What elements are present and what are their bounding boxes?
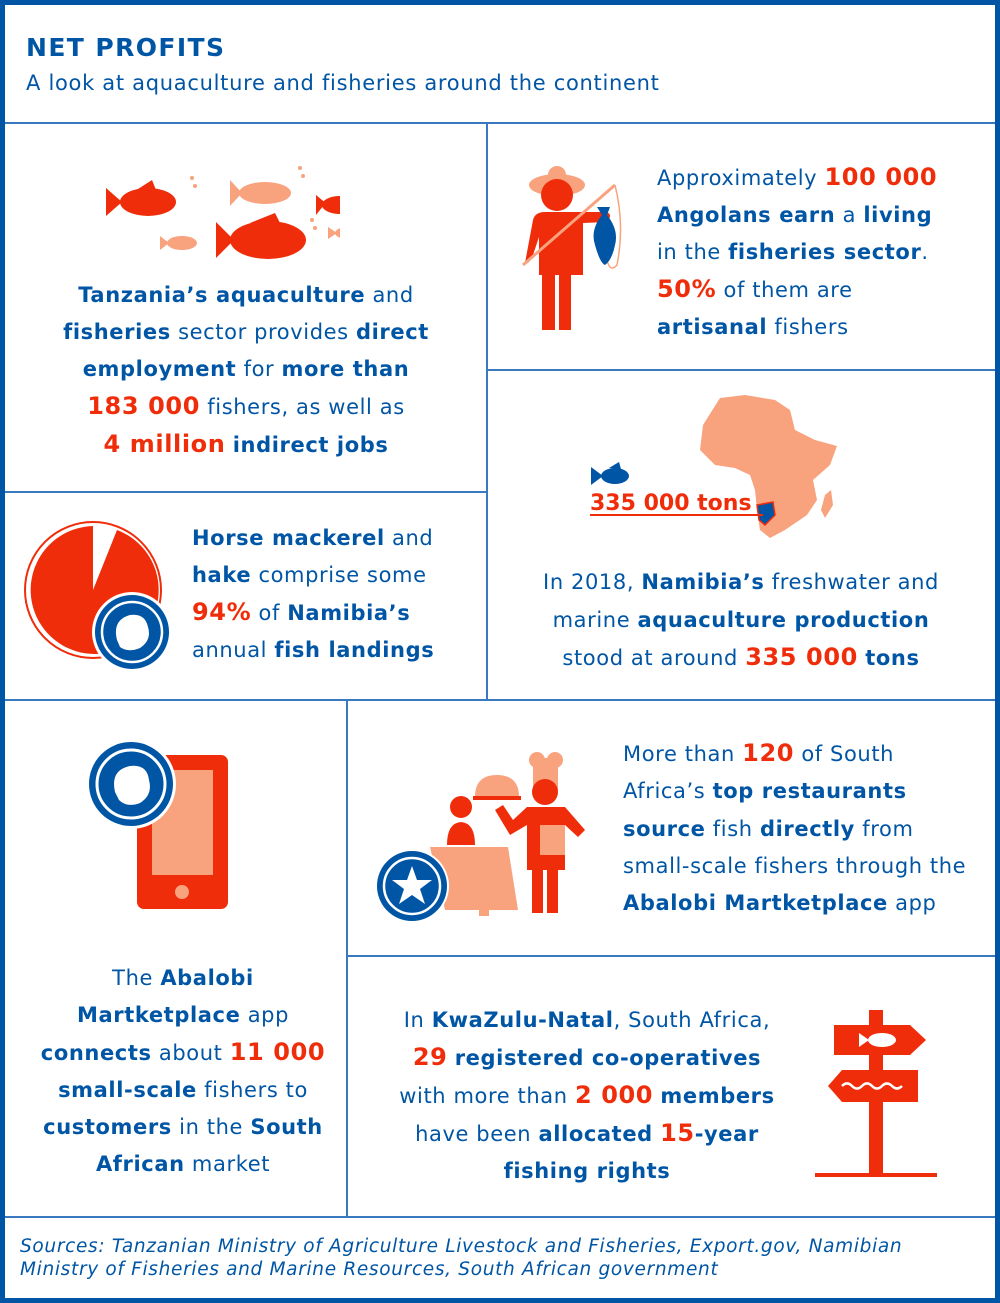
chart: pie 94%	[24, 521, 169, 669]
text: Abalobi app	[41, 966, 325, 1176]
text: Tanzania: fisheries sector provides direct	[63, 320, 429, 344]
text: Tanzania: Tanzania’s aquaculture and	[78, 283, 414, 307]
title: NET PROFITS	[26, 33, 225, 62]
icon: map of Africa	[590, 395, 837, 538]
text: KwaZulu-Natal: with more than 2 000 members	[399, 1081, 775, 1109]
text: Namibia production: In 2018, Namibia’s freshwater and	[543, 570, 939, 594]
text: Abalobi app: African market	[96, 1152, 270, 1176]
text: Abalobi app: The Abalobi	[112, 966, 254, 990]
text: Tanzania: 183 000 fishers, as well as	[87, 392, 405, 420]
subtitle: A look at aquaculture and fisheries around the continent	[26, 71, 660, 95]
text: restaurants: Africa’s top restaurants	[623, 779, 907, 803]
text: KwaZulu-Natal: fishing rights	[504, 1159, 670, 1183]
icon: school of fish	[106, 166, 340, 259]
text: restaurants: Abalobi Martketplace app	[623, 891, 936, 915]
text: Angola: Approximately 100 000	[657, 163, 937, 191]
text: Angola: in the fisheries sector.	[657, 240, 929, 264]
icon: fisherman	[522, 166, 622, 330]
text: KwaZulu-Natal	[399, 1008, 775, 1183]
icon: restaurant chef and waiter	[377, 752, 585, 921]
text: KwaZulu-Natal: In KwaZulu-Natal, South Africa,	[404, 1008, 770, 1032]
text: Angola: 50% of them are	[657, 275, 853, 303]
text: Tanzania	[63, 283, 429, 458]
text: Namibia production: stood at around 335 000 tons	[562, 643, 920, 671]
text: restaurants: source fish directly from	[623, 817, 914, 841]
sources: Ministry of Fisheries and Marine Resources, South African government	[20, 1259, 718, 1280]
text: KwaZulu-Natal: 29 registered co-operatives	[413, 1043, 761, 1071]
text: restaurants: More than 120 of South	[623, 739, 894, 767]
text: horse mackerel: Horse mackerel and	[192, 526, 433, 550]
text: Abalobi app: customers in the South	[43, 1115, 323, 1139]
text: horse mackerel	[192, 526, 434, 662]
text: horse mackerel: annual fish landings	[192, 638, 434, 662]
icon: phone	[89, 742, 228, 909]
text: Tanzania: employment for more than	[83, 357, 409, 381]
icon: signpost	[815, 1010, 937, 1177]
text: Angola: Angolans earn a living	[657, 203, 932, 227]
text: Tanzania: 4 million indirect jobs	[104, 430, 388, 458]
sources	[20, 1236, 902, 1280]
text: Abalobi app: Martketplace app	[77, 1003, 289, 1027]
text: horse mackerel: hake comprise some	[192, 563, 427, 587]
text: Abalobi app: connects about 11 000	[41, 1038, 325, 1066]
text: horse mackerel: 94% of Namibia’s	[192, 598, 410, 626]
label: 335 000 tons: 335 000 tons	[590, 491, 752, 516]
text: Angola: artisanal fishers	[657, 315, 849, 339]
text: KwaZulu-Natal: have been allocated 15-year	[415, 1119, 759, 1147]
sources: Sources: Tanzanian Ministry of Agriculture Livestock and Fisheries, Export.gov, Namibian	[20, 1236, 902, 1257]
text: Namibia production: marine aquaculture production	[553, 608, 929, 632]
text: restaurants: small-scale fishers through the	[623, 854, 966, 878]
text: Abalobi app: small-scale fishers to	[58, 1078, 308, 1102]
text: Namibia production	[543, 570, 939, 671]
text: Angola	[657, 163, 937, 339]
text: restaurants	[623, 739, 966, 915]
